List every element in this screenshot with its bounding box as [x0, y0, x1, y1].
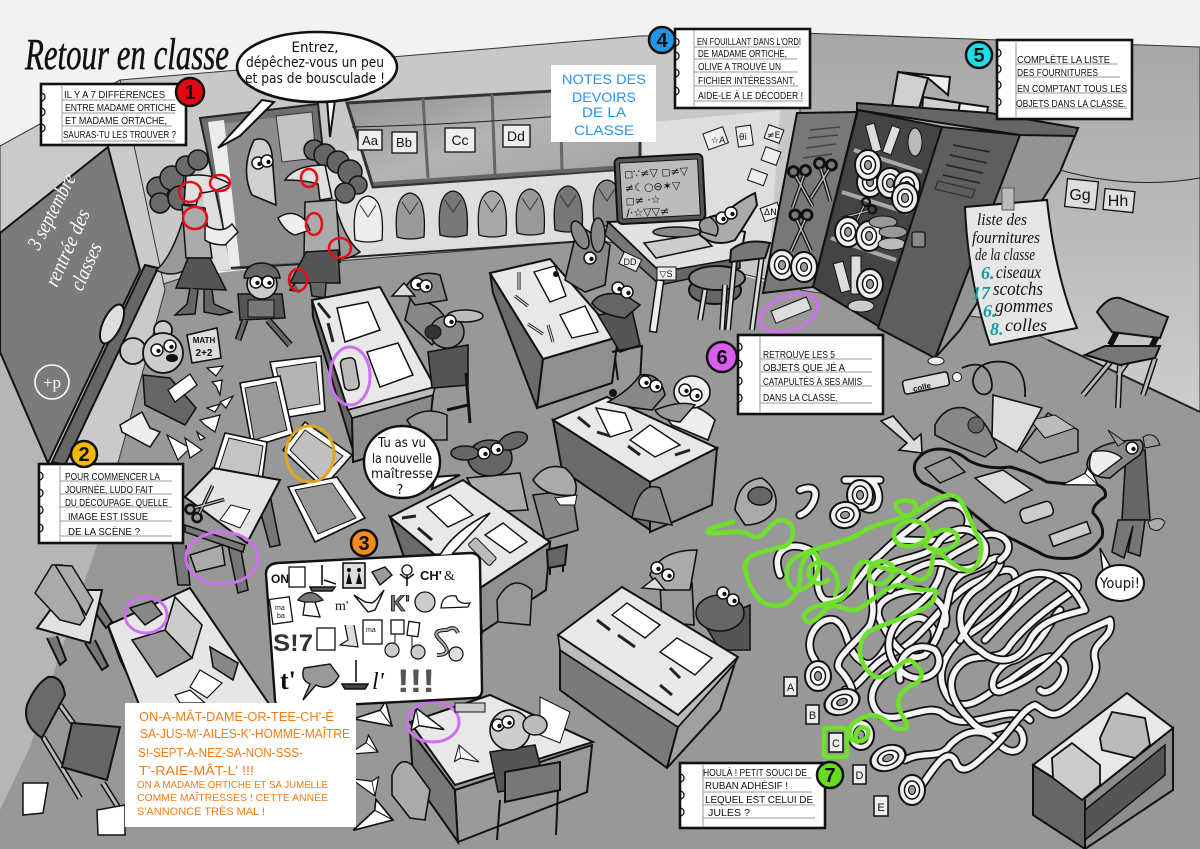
notebook 6: RETROUVE LES 5 [763, 349, 835, 361]
paper scraps [167, 366, 233, 460]
teacher Madame Ortache [278, 140, 367, 298]
hair [147, 150, 208, 213]
dark student [592, 282, 642, 382]
homework note, blue: DE LA [582, 104, 627, 120]
photo 2 [240, 376, 293, 447]
rebus row 2 [269, 590, 470, 624]
paper planes [344, 701, 393, 840]
card Aa [358, 130, 382, 150]
notebook 2 [39, 441, 183, 543]
desk leg [650, 280, 664, 332]
chalkboard classes: classes [65, 239, 107, 294]
notebook 5: EN COMPTANT TOUS LES [1017, 83, 1127, 95]
number badge 7 [817, 762, 843, 788]
monitor: ◻∵≠▽ ◻≠▽ [624, 164, 689, 181]
card Dd [503, 125, 530, 147]
answer circle, orange [286, 426, 334, 482]
desk F with mouse and plane [407, 695, 593, 842]
magenta circle: glue under locker [755, 287, 823, 339]
ribbon maze [777, 480, 1111, 795]
number badge 1 [176, 78, 204, 106]
lockers [763, 72, 1078, 358]
dog student [425, 310, 483, 423]
label C [829, 733, 843, 752]
speech bubble: new teacher [364, 426, 460, 498]
body [182, 205, 212, 258]
hanging cards Gg Hh: Gg [1069, 187, 1091, 204]
sticky note VS: ▽S [660, 269, 672, 279]
dog [696, 587, 750, 650]
math book [187, 328, 221, 363]
poster: supply list [965, 188, 1077, 345]
left chair [26, 677, 120, 807]
notebook 7: RUBAN ADHÉSIF ! [705, 779, 788, 792]
label E [874, 796, 888, 816]
chalk doodle [35, 365, 69, 399]
speech bubble: new teacher: ? [397, 483, 403, 498]
poster title: liste des [977, 210, 1027, 229]
peeking kid in doorway [246, 139, 276, 205]
notebook [975, 470, 1032, 503]
small table with scissors and notebook [172, 468, 280, 593]
card Dd: Dd [507, 128, 525, 144]
window with alphabet cards [347, 86, 640, 187]
rebus panel [266, 513, 490, 708]
poster: supply list: scotchs [993, 279, 1043, 300]
dog [451, 428, 530, 512]
sharpener [925, 457, 965, 483]
sticky note VS [657, 267, 676, 280]
notebook 4 [649, 27, 810, 108]
notebook 7 [680, 762, 843, 828]
mouse student [490, 710, 547, 792]
stapler [935, 408, 997, 457]
label C: C [832, 738, 840, 750]
right door [878, 127, 1020, 358]
object area outline and objects [914, 449, 1106, 558]
desk with bird and dog [312, 273, 483, 462]
sharpener circled [125, 597, 167, 633]
notebook 5: COMPLÈTE LA LISTE [1017, 53, 1110, 66]
Olive head [699, 193, 757, 243]
answer panel, orange: ON-A-MÂT-DAME-OR-TEE-CH'-É [139, 709, 334, 724]
mouse Ludo cutting paper [120, 321, 233, 460]
rebus row 1: CH' [420, 568, 442, 583]
number badge 2: 2 [78, 444, 90, 466]
notebook 1: ENTRE MADAME ORTICHE [65, 102, 176, 114]
poster: supply list: de la classe [975, 245, 1035, 264]
number badge 4: 4 [656, 30, 668, 52]
crocodile student [608, 375, 665, 410]
glue and circle [330, 347, 370, 405]
number badge 1: 1 [184, 82, 196, 104]
glue tube [1049, 522, 1091, 546]
number badge 5: 5 [973, 45, 985, 67]
homework note, blue: CLASSE [574, 122, 634, 138]
speech bubble: Youpi: Youpi! [1099, 576, 1140, 592]
open left door [763, 112, 857, 293]
poster: supply list: gommes [995, 296, 1053, 317]
desk C [553, 375, 717, 532]
speech bubble: new teacher: Tu as vu [377, 436, 426, 451]
card Bb [392, 132, 417, 153]
notebook 2: IMAGE EST ISSUE [68, 511, 148, 523]
book stack [1020, 413, 1078, 463]
chicken student [655, 376, 715, 440]
monitor: ≠☾○⊖✶▽ [625, 179, 681, 195]
poster: supply list: 8. [990, 319, 1004, 339]
number badge 6: 6 [716, 347, 728, 369]
wall sticky notes: θi [739, 133, 747, 143]
notebook 1: IL Y A 7 DIFFÉRENCES [64, 88, 165, 101]
notebook 1 [41, 78, 204, 145]
poster: supply list: 6. [981, 263, 994, 283]
backpack [632, 487, 672, 525]
book stand [210, 647, 238, 680]
right wall [800, 33, 1200, 412]
poster: supply list: fournitures [972, 228, 1040, 247]
label D [853, 765, 866, 784]
interior shelves [813, 110, 942, 327]
cape [156, 220, 192, 274]
tape rolls [805, 661, 831, 691]
coats on wall [354, 180, 621, 242]
comb [455, 703, 485, 712]
label B [806, 705, 819, 724]
locker top slab [857, 103, 1078, 136]
answer panel, orange: S'ANNONCE TRÈS MAL ! [137, 805, 265, 818]
speech bubble: teacher: et pas de bousculade ! [245, 71, 385, 87]
notebook 2: POUR COMMENCER LA [65, 471, 160, 483]
number badge 5 [966, 42, 992, 68]
paper plane [1059, 464, 1098, 493]
rebus row 2: ba [277, 613, 285, 620]
homework note, blue: DEVOIRS [572, 89, 636, 105]
monitor: /·☆▽▽≠ [626, 205, 670, 220]
notebook 4: FICHIER INTÉRESSANT, [698, 74, 795, 87]
chalkboard [0, 147, 158, 465]
math book: MATH [193, 336, 215, 345]
tape rolls with labels [784, 480, 925, 816]
pencil case [1019, 500, 1055, 525]
card Cc: Cc [451, 132, 469, 148]
number badge 3: 3 [358, 533, 370, 555]
notebook 5: OBJETS DANS LA CLASSE. [1016, 98, 1126, 110]
speech bubble: teacher: dépêchez-vous un peu [246, 55, 384, 71]
wall sticky notes: ΔN [764, 208, 777, 218]
rebus row 1: ON [271, 572, 289, 586]
speech bubble: teacher [218, 32, 397, 148]
math book: 2+2 [196, 348, 213, 359]
white arrow [881, 416, 922, 453]
wall sticky notes: ☆A [711, 136, 726, 146]
rebus row 3: ma [366, 627, 376, 634]
homework note, blue: NOTES DES [562, 71, 646, 87]
rebus row 1: & [444, 569, 455, 584]
label B: B [809, 710, 816, 722]
notebook 4: EN FOUILLANT DANS L'ORDI [697, 36, 801, 48]
wall base line [337, 240, 1200, 412]
poster: supply list: colles [1005, 315, 1047, 335]
book stack B [1052, 743, 1100, 800]
speech bubble: Youpi [1096, 548, 1144, 601]
book stack A [1100, 712, 1150, 758]
label A [784, 677, 797, 696]
computer desk with monitor [605, 154, 745, 332]
chalkboard subject: rentrée des [40, 205, 95, 290]
glue and curly string: colle [912, 381, 932, 394]
chair [547, 545, 567, 575]
answer panel, orange [125, 703, 356, 827]
keyboard [644, 234, 712, 258]
notebook 1: ET MADAME ORTACHE, [65, 115, 167, 127]
desk B with long-snout students [490, 218, 642, 408]
photo 4 [283, 422, 352, 488]
open book [120, 412, 160, 447]
right-side objects pile [935, 395, 1078, 463]
answer panel, orange: ON A MADAME ORTICHE ET SA JUMELLE [137, 779, 328, 791]
notebook 6 [707, 335, 883, 414]
classroom door [200, 104, 340, 268]
answer panel, orange: COMME MAÎTRESSES ! CETTE ANNÉE [137, 791, 328, 804]
notebook 4: DE MADAME ORTICHE, [698, 48, 787, 60]
side table with binders [35, 565, 112, 670]
lower-left lighter floor [0, 352, 118, 810]
drawing sheet [992, 395, 1042, 452]
desk E with bird and dog [558, 550, 750, 768]
bookshelf lower right [1033, 693, 1173, 849]
boxes on top [892, 72, 988, 123]
speech bubble: teacher: Entrez, [292, 40, 338, 56]
hand [205, 224, 238, 245]
pig boy walking [238, 263, 290, 345]
label A: A [787, 682, 795, 694]
poster: supply list: 17 [972, 283, 991, 303]
poster: supply list: ciseaux [996, 262, 1041, 282]
rebus row 2: K' [390, 591, 410, 616]
number badge 3 [351, 530, 377, 556]
wall sticky notes [703, 125, 784, 222]
backpack [497, 583, 532, 625]
notebook 6: OBJETS QUE JÉ A [763, 361, 845, 374]
sticky note DD: DD [624, 257, 637, 267]
card Aa: Aa [362, 133, 379, 148]
rebus row 4: t' [280, 666, 296, 695]
skirt [176, 258, 226, 290]
card Bb: Bb [396, 135, 412, 150]
number badge 6 [707, 342, 737, 372]
glue and curly string [902, 357, 1025, 397]
sticky note DD [619, 252, 642, 272]
teacher Madame Ortiche [147, 150, 238, 315]
answer panel, orange: SA-JUS-M'-AILES-K'-HOMME-MAÎTRE [140, 726, 350, 741]
chalkboard date: 3 septembre [22, 169, 81, 254]
hanging cards Gg Hh [1060, 170, 1200, 213]
laptop [132, 597, 202, 677]
rebus row 2: m' [335, 599, 348, 614]
notebook 6: DANS LA CLASSE. [763, 392, 838, 404]
answer panel, orange: T'-RAIE-MÂT-L' !!! [139, 763, 254, 778]
notebook 2: JOURNÉE, LUDO FAIT [65, 483, 153, 496]
notebook 2: DU DÉCOUPAGE. QUELLE [65, 496, 168, 509]
speech bubble: new teacher: la nouvelle [372, 452, 432, 467]
scattered sheets lower left [23, 783, 125, 835]
face [184, 175, 230, 205]
rebus row 2: ma [275, 605, 285, 612]
label E: E [877, 802, 885, 814]
rebus row 4: !!! [397, 663, 435, 699]
notebook 2: DE LA SCÈNE ? [68, 525, 140, 538]
notebook 4: AIDE-LE À LE DÉCODER ! [698, 89, 803, 102]
card Cc [445, 128, 475, 152]
chair right [1083, 298, 1168, 408]
rebus row 1 [271, 563, 455, 591]
monitor stand [653, 227, 701, 237]
homework note, blue [551, 65, 656, 142]
red difference circles [179, 169, 351, 291]
wall sticky notes: ≠E [767, 131, 781, 141]
computer chair and character Olive [689, 193, 770, 330]
backpack [407, 411, 447, 440]
classroom floor [0, 240, 1200, 849]
notebook 6: CATAPULTÉS À SES AMIS [763, 375, 862, 388]
bird student [392, 273, 448, 345]
photo 5 [288, 477, 365, 542]
title: Retour en classe [24, 30, 229, 79]
chalk doodle: +p [43, 373, 61, 392]
answer panel, orange: S!-SEPT-A-NEZ-SA-NON-SSS- [138, 745, 303, 760]
photo set [210, 356, 365, 542]
notebook 4: OLIVE A TROUVÉ UN [698, 60, 781, 73]
locker side [935, 128, 1078, 358]
number badge 4 [649, 27, 675, 53]
glue tube on desk [468, 537, 497, 566]
striped character in ribbons [735, 478, 776, 525]
chair [497, 762, 560, 840]
hanging cards Gg Hh: Hh [1108, 193, 1128, 210]
notebook 7: HOULÀ ! PETIT SOUCI DE [703, 766, 807, 779]
kid with cap [533, 466, 578, 540]
chalk eraser [95, 301, 129, 347]
green solution path [708, 495, 981, 757]
notebook 5 [966, 40, 1132, 119]
laptop desk [108, 588, 280, 720]
left wall [0, 80, 165, 465]
notebook 1: SAURAS-TU LES TROUVER ? [63, 129, 176, 141]
photo 1 [270, 356, 325, 418]
back wall [120, 33, 810, 290]
rebus row 3: S!7 [273, 630, 313, 657]
backpack near plane desk [392, 762, 430, 820]
poster: supply list: 6. [983, 301, 996, 321]
speech bubble: new teacher: maîtresse [371, 467, 433, 482]
legs and shoes [175, 288, 232, 315]
photo 3 [210, 433, 267, 497]
notebook under table [190, 545, 225, 572]
notebook 7: LEQUEL EST CELUI DE [705, 794, 813, 806]
label D: D [856, 770, 864, 782]
number badge 7: 7 [824, 765, 836, 787]
rebus row 4: l' [372, 669, 385, 695]
monitor: ◻≠ ·☆ [625, 193, 661, 208]
bird [642, 550, 697, 625]
rebus row 4 [280, 660, 435, 700]
desk D with dog and kid [390, 428, 578, 632]
rebus row 3 [273, 620, 463, 661]
notebook 7: JULES ? [708, 807, 750, 819]
long-eared student [553, 218, 610, 292]
notebook 5: DES FOURNITURES [1017, 67, 1098, 79]
tall character [1087, 430, 1165, 558]
number badge 2 [71, 441, 97, 467]
monitor [614, 154, 706, 224]
